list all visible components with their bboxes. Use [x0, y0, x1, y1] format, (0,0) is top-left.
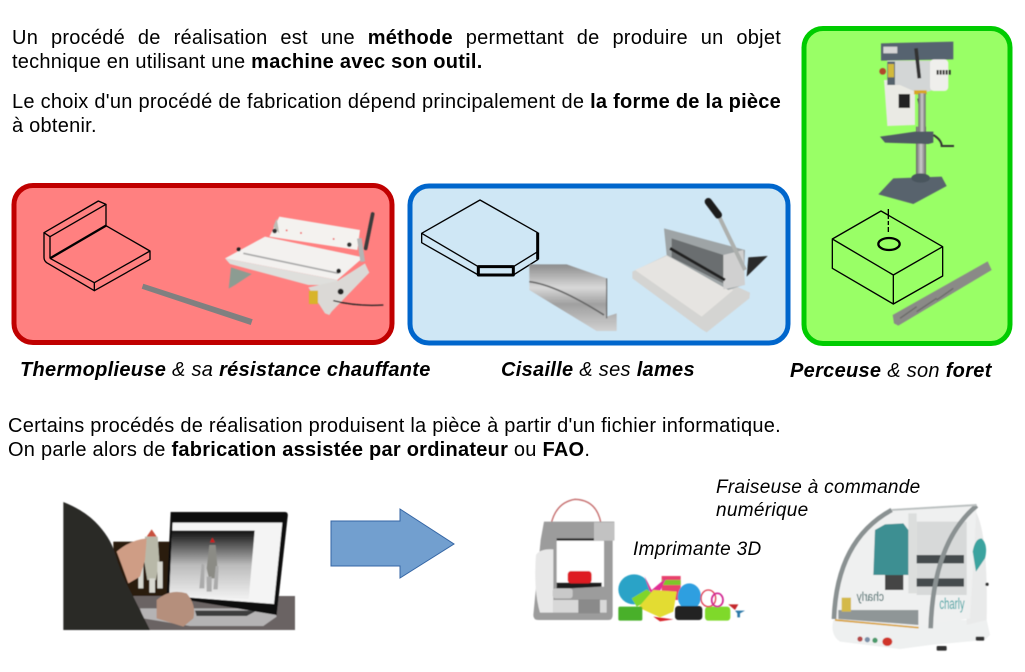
drawing: bent part [44, 201, 150, 291]
machine: drill press [878, 42, 954, 204]
FAO paragraph: On parle alors de fabrication assistée par ordinateur ou FAO. [8, 439, 590, 461]
panel: thermoplieuse [14, 186, 392, 342]
caption: perceuse: Perceuse & son foret [790, 360, 992, 382]
drawing: drilled block [832, 209, 943, 304]
FAO paragraph [8, 415, 781, 461]
panel: cisaille [410, 186, 788, 343]
label: fraiseuse: numérique [716, 500, 808, 520]
drawing: cut part [422, 200, 538, 275]
text: Un procédé de réalisation est une méthode permettant de produire un objet [12, 27, 781, 49]
label: fraiseuse: Fraiseuse à commande [716, 477, 921, 498]
blade [529, 264, 617, 331]
machine: cisaille [632, 202, 768, 332]
machine: thermoplieuse [225, 214, 383, 315]
heating element bar [142, 284, 253, 325]
label: imprimante 3D: Imprimante 3D [633, 539, 762, 560]
text: technique en utilisant une machine avec son outil. [12, 51, 483, 73]
form paragraph: à obtenir. [12, 115, 97, 137]
drill bit [893, 261, 992, 326]
caption: cisaille: Cisaille & ses lames [501, 359, 695, 381]
label: fraiseuse [716, 477, 921, 520]
FAO paragraph: Certains procédés de réalisation produisent la pièce à partir d'un fichier informatique. [8, 415, 781, 437]
caption: thermoplieuse: Thermoplieuse & sa résistance chauffante [20, 359, 431, 381]
photo: CNC milling machine: charly [939, 596, 965, 613]
photo: CNC milling machine: charly [856, 590, 884, 604]
form paragraph: Le choix d'un procédé de fabrication dépend principalement de la forme de la pièce [12, 91, 781, 113]
form paragraph [12, 91, 781, 137]
panel: perceuse [804, 28, 1010, 344]
